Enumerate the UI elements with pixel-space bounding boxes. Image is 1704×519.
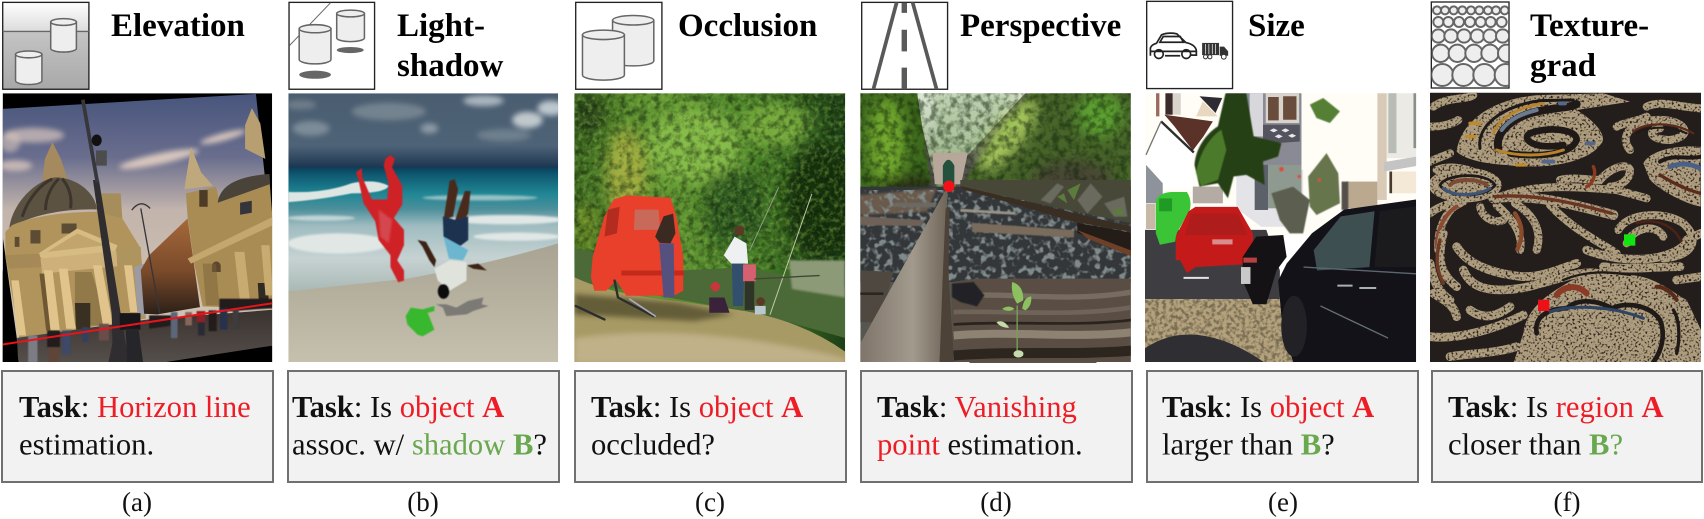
black wedges <box>2 270 272 362</box>
icon: light-shadow <box>289 2 375 89</box>
sleepers <box>860 203 1074 238</box>
photo: paisley fabric <box>1428 93 1701 363</box>
dark rock <box>952 282 984 306</box>
big sleeper <box>952 279 1133 362</box>
foam <box>287 195 565 254</box>
tree <box>1194 93 1281 198</box>
region B marker <box>1624 234 1635 246</box>
task box (d): Task: Vanishing <box>877 390 1077 424</box>
swirl colour accents <box>1437 103 1701 250</box>
left church facade <box>5 212 146 338</box>
object A: red van <box>591 195 684 296</box>
lamp post with base <box>93 180 143 363</box>
left sleeper <box>860 270 893 322</box>
fishing rods and bike <box>576 188 819 319</box>
buildings and tree <box>1146 93 1417 233</box>
title: Perspective: Perspective <box>960 8 1121 44</box>
upper lamp and camera <box>83 100 107 183</box>
task box (d) <box>861 371 1132 482</box>
right paisley <box>1643 146 1701 207</box>
foliage tones <box>572 95 860 260</box>
title: Light-shadow: shadow <box>397 48 504 84</box>
task box (f): closer than B? <box>1448 428 1623 462</box>
towers above the frame <box>42 108 265 189</box>
right building <box>1347 93 1417 208</box>
swirl dark lines <box>1440 100 1701 195</box>
task box (a): estimation. <box>19 428 154 462</box>
back drum <box>96 193 122 218</box>
icon: occlusion <box>576 2 662 89</box>
task box (d): point estimation. <box>877 428 1083 462</box>
title: Light-shadow: Light- <box>397 8 485 44</box>
scooter <box>1241 235 1287 304</box>
task box (e): larger than B? <box>1162 428 1335 462</box>
icon: elevation <box>3 2 89 89</box>
icon: perspective road <box>862 2 948 90</box>
task box (a) <box>2 371 273 482</box>
plaza <box>17 310 273 363</box>
road <box>1145 230 1280 299</box>
seedling <box>996 282 1031 358</box>
task box (e): Task: Is object A <box>1162 390 1374 424</box>
object B: green van <box>1156 192 1191 245</box>
title: Light-shadow <box>397 8 504 84</box>
red-brown roof and white gable <box>1146 115 1223 229</box>
shadow B (green) <box>406 306 434 336</box>
thin street lamp <box>132 204 160 314</box>
task box (b): Task: Is object A <box>292 390 504 424</box>
right rock wall <box>960 180 1133 223</box>
photo: beach backflip <box>286 93 565 364</box>
second figure <box>418 179 487 299</box>
flower motif <box>1513 273 1701 363</box>
title: Size: Size <box>1248 8 1305 44</box>
wave <box>288 181 389 202</box>
task box (b): assoc. w/ shadow B? <box>292 428 547 462</box>
lower accents <box>1437 240 1679 362</box>
title: Occlusion: Occlusion <box>678 8 817 44</box>
task box (f) <box>1432 371 1702 482</box>
upper paisley pattern <box>1428 93 1701 258</box>
near rail <box>860 189 948 362</box>
object A: red figure <box>356 155 404 282</box>
photo: railway track <box>860 91 1133 364</box>
photo: piazza with horizon line <box>0 93 274 364</box>
ground <box>574 277 845 364</box>
hanging plant <box>1310 98 1340 123</box>
task box (c): Task: Is object A <box>591 390 803 424</box>
caption (b): (b) <box>407 487 439 517</box>
fishing figures <box>655 214 766 314</box>
icon: size car and truck <box>1147 1 1233 89</box>
task box (a): Task: Horizon line <box>19 390 251 424</box>
region A marker <box>1538 300 1549 311</box>
black car <box>1278 199 1416 364</box>
caption (d): (d) <box>980 487 1012 517</box>
task box (e) <box>1147 371 1418 482</box>
vanishing point <box>943 181 955 192</box>
cast shadow <box>436 297 488 316</box>
object A: red car <box>1176 207 1254 273</box>
caption (c): (c) <box>695 487 725 517</box>
left house strips <box>1156 93 1222 116</box>
task box (f): Task: Is region A <box>1448 390 1664 424</box>
tunnel <box>932 153 968 184</box>
far rail <box>960 186 1133 232</box>
clouds <box>286 95 565 141</box>
title: Texture-grad <box>1530 8 1649 84</box>
lower scene: churches and plaza <box>0 174 274 363</box>
orange palazzo <box>141 218 200 314</box>
caption (e): (e) <box>1268 487 1298 517</box>
river <box>574 248 845 338</box>
crowd <box>28 299 273 363</box>
title: Texture-grad: grad <box>1530 48 1596 84</box>
half-timbered house <box>1226 93 1303 227</box>
title: Elevation: Elevation <box>111 8 245 44</box>
gap of sky near the street <box>134 264 146 317</box>
task box (b) <box>288 371 559 482</box>
eye motif <box>1428 168 1502 202</box>
photo: street with cars <box>1145 93 1417 364</box>
sand <box>288 243 558 364</box>
stone wall <box>789 260 845 297</box>
ballast <box>860 187 1133 282</box>
foliage walls <box>860 93 931 199</box>
icon: texture gradient <box>1431 2 1517 88</box>
caption (a): (a) <box>122 487 152 517</box>
main paisley <box>1457 93 1630 167</box>
task box (c) <box>575 371 846 482</box>
caption (f): (f) <box>1554 487 1580 517</box>
track bed <box>860 180 1133 362</box>
task box (c): occluded? <box>591 428 715 462</box>
left dome <box>9 177 97 228</box>
right church <box>186 174 273 309</box>
photo: red van by the river <box>572 93 860 364</box>
cobbles <box>1145 299 1293 364</box>
title: Texture-grad: Texture- <box>1530 8 1649 44</box>
clouds <box>0 127 247 173</box>
lower paisley pattern <box>1430 233 1701 363</box>
horizon line <box>0 303 274 345</box>
rose shrubs <box>1271 153 1348 233</box>
corner and side motifs <box>1430 95 1701 258</box>
